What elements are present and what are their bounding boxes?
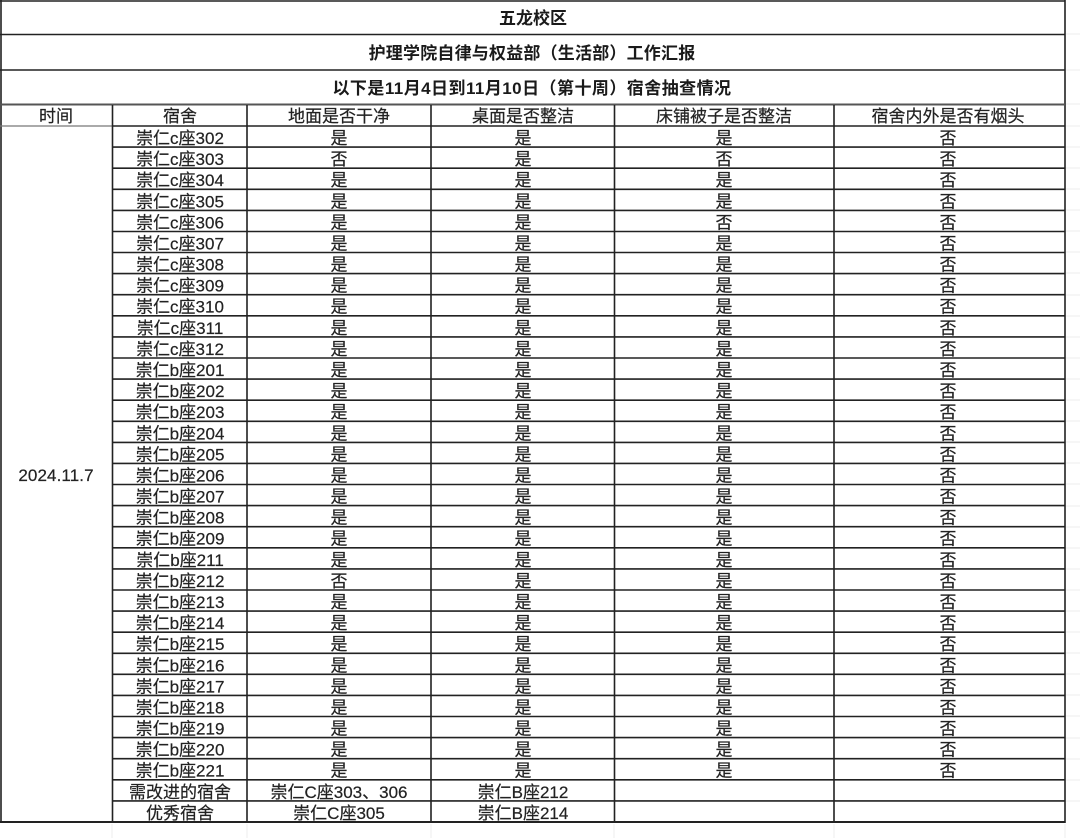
row b214: 是 <box>514 614 532 633</box>
row b201: 是 <box>514 361 532 380</box>
row b211: 是 <box>330 551 348 570</box>
row b219: 是 <box>330 720 348 738</box>
row c312: 是 <box>716 340 732 359</box>
row c304 <box>136 171 956 190</box>
row b215 <box>136 635 956 654</box>
row c309 <box>136 277 956 296</box>
row b213: 崇仁b座213 <box>136 593 224 612</box>
row b201 <box>136 361 956 380</box>
row c306 <box>136 213 956 232</box>
row b219: 崇仁b座219 <box>136 720 224 738</box>
row c308: 崇仁c座308 <box>136 256 224 274</box>
row b203 <box>136 403 956 422</box>
row b204: 否 <box>940 424 956 443</box>
row c302: 是 <box>716 129 732 148</box>
title: campus: 五龙校区 <box>499 8 567 28</box>
row b202: 是 <box>330 382 348 401</box>
row b203: 否 <box>940 403 956 422</box>
row b208: 是 <box>330 509 348 528</box>
row c305: 是 <box>514 192 532 211</box>
row c305: 否 <box>940 192 956 211</box>
row b209: 否 <box>940 530 956 549</box>
row b203: 崇仁b座203 <box>136 403 224 422</box>
row c306: 否 <box>716 213 732 232</box>
row b202: 是 <box>514 382 532 401</box>
row c306: 崇仁c座306 <box>136 213 224 232</box>
row c302: 崇仁c座302 <box>136 129 224 148</box>
row b205: 崇仁b座205 <box>136 445 224 464</box>
row b201: 是 <box>716 361 732 380</box>
row b219: 是 <box>514 720 532 738</box>
table header row: 宿舍 <box>163 107 197 126</box>
row b203: 是 <box>514 403 532 422</box>
row b202 <box>136 382 956 401</box>
row b221: 崇仁b座221 <box>136 762 224 781</box>
row: excellent dorms: 崇仁C座305 <box>293 804 385 823</box>
row b211: 否 <box>940 551 956 570</box>
title: inspection period: 以下是11月4日到11月10日（第十周）宿舍抽查情况 <box>332 78 732 98</box>
row b204: 是 <box>716 424 732 443</box>
row b219: 否 <box>940 720 956 738</box>
row c304: 崇仁c座304 <box>136 171 224 190</box>
row c310: 是 <box>716 298 732 317</box>
row b212: 否 <box>330 572 348 591</box>
row b221: 是 <box>514 762 532 781</box>
row: dorms needing improvement: 崇仁C座303、306 <box>270 783 408 802</box>
row b208: 否 <box>940 509 956 528</box>
row b215: 是 <box>330 635 348 654</box>
row b214: 是 <box>330 614 348 633</box>
row c309: 是 <box>716 277 732 296</box>
row c307: 是 <box>514 234 532 254</box>
row c303: 是 <box>514 150 532 169</box>
row b214: 是 <box>716 614 732 633</box>
row b221 <box>136 762 956 781</box>
row c304: 是 <box>330 171 348 190</box>
row b220: 是 <box>514 741 532 760</box>
row c303 <box>136 150 956 169</box>
row c312 <box>136 340 956 359</box>
row b218: 崇仁b座218 <box>136 698 224 717</box>
row b206: 否 <box>940 466 956 485</box>
row c309: 是 <box>514 277 532 296</box>
row c309: 否 <box>940 277 956 296</box>
row b202: 否 <box>940 382 956 401</box>
row c311: 是 <box>514 319 532 338</box>
table header row: 时间 <box>39 107 73 126</box>
row b211: 崇仁b座211 <box>136 551 224 570</box>
row c312: 否 <box>940 340 956 359</box>
row b211: 是 <box>514 551 532 570</box>
row b219 <box>136 720 956 738</box>
row c311 <box>137 319 956 338</box>
row b212: 否 <box>940 572 956 591</box>
row b206 <box>136 466 956 485</box>
row c305 <box>136 192 956 211</box>
row: dorms needing improvement: 崇仁B座212 <box>478 783 568 802</box>
row b216: 是 <box>330 656 348 675</box>
row c309: 崇仁c座309 <box>136 277 224 296</box>
date cell: 2024.11.7 <box>18 466 94 485</box>
table header row: 桌面是否整洁 <box>472 107 574 126</box>
row b217: 是 <box>716 677 732 696</box>
row c312: 是 <box>514 340 532 359</box>
row c311: 是 <box>716 319 732 338</box>
row c312: 是 <box>330 340 348 359</box>
row c305: 是 <box>716 192 732 211</box>
row b220: 是 <box>330 741 348 760</box>
row c308: 是 <box>514 256 532 274</box>
row b203: 是 <box>716 403 732 422</box>
row b216: 是 <box>716 656 732 675</box>
row b202: 崇仁b座202 <box>136 382 224 401</box>
row c307 <box>136 234 956 254</box>
row b217: 是 <box>514 677 532 696</box>
row b215: 是 <box>514 635 532 654</box>
row c304: 是 <box>514 171 532 190</box>
row b209: 是 <box>330 530 348 549</box>
row c307: 崇仁c座307 <box>136 234 224 254</box>
row b221: 是 <box>716 762 732 781</box>
row b201: 否 <box>940 361 956 380</box>
row b217: 否 <box>940 677 956 696</box>
row b206: 是 <box>716 466 732 485</box>
row b204 <box>136 424 956 443</box>
row c305: 崇仁c座305 <box>136 192 224 211</box>
row b213: 否 <box>940 593 956 612</box>
row b220 <box>136 741 956 760</box>
row b209: 崇仁b座209 <box>136 530 224 549</box>
row c308: 是 <box>716 256 732 274</box>
row b216: 崇仁b座216 <box>136 656 224 675</box>
row b215: 是 <box>716 635 732 654</box>
row b205 <box>136 445 956 464</box>
row b218: 是 <box>330 698 348 717</box>
row b205: 是 <box>514 445 532 464</box>
row b202: 是 <box>716 382 732 401</box>
row c312: 崇仁c座312 <box>136 340 224 359</box>
row b207: 否 <box>940 488 956 506</box>
row b207: 是 <box>514 488 532 506</box>
row b201: 是 <box>330 361 348 380</box>
row b207: 是 <box>716 488 732 506</box>
row b204: 是 <box>330 424 348 443</box>
row b214 <box>136 614 956 633</box>
row c306: 是 <box>514 213 532 232</box>
row b216: 否 <box>940 656 956 675</box>
table header row: 宿舍内外是否有烟头 <box>872 107 1024 126</box>
row b220: 是 <box>716 741 732 760</box>
row b204: 崇仁b座204 <box>136 424 224 443</box>
row b206: 是 <box>330 466 348 485</box>
row b214: 崇仁b座214 <box>136 614 224 633</box>
row c308 <box>136 256 956 274</box>
row b201: 崇仁b座201 <box>136 361 224 380</box>
row: dorms needing improvement: 需改进的宿舍 <box>129 783 231 802</box>
row b205: 是 <box>716 445 732 464</box>
row c303: 否 <box>330 150 348 169</box>
row b215: 否 <box>940 635 956 654</box>
row c302: 否 <box>940 129 956 148</box>
row c303: 否 <box>716 150 732 169</box>
title: department report: 护理学院自律与权益部（生活部）工作汇报 <box>369 43 695 63</box>
row c308: 是 <box>330 256 348 274</box>
row: excellent dorms: 优秀宿舍 <box>146 804 214 823</box>
row b205: 是 <box>330 445 348 464</box>
row b212 <box>136 572 956 591</box>
row b203: 是 <box>330 403 348 422</box>
row c310 <box>136 298 956 317</box>
row c310: 否 <box>940 298 956 317</box>
row b207: 是 <box>330 488 348 506</box>
row b206: 崇仁b座206 <box>136 466 224 485</box>
row c306: 否 <box>940 213 956 232</box>
row b218: 是 <box>716 698 732 717</box>
row b212: 是 <box>716 572 732 591</box>
row b218: 是 <box>514 698 532 717</box>
row c311: 崇仁c座311 <box>137 319 223 338</box>
row b220: 否 <box>940 741 956 760</box>
row b218 <box>136 698 956 717</box>
row b214: 否 <box>940 614 956 633</box>
row c307: 是 <box>716 234 732 254</box>
row c302: 是 <box>514 129 532 148</box>
row b206: 是 <box>514 466 532 485</box>
row b208 <box>136 509 956 528</box>
row c304: 是 <box>716 171 732 190</box>
row b215: 崇仁b座215 <box>136 635 224 654</box>
row b219: 是 <box>716 720 732 738</box>
row c310: 是 <box>514 298 532 317</box>
row b207 <box>136 488 956 506</box>
row b213: 是 <box>514 593 532 612</box>
row b208: 崇仁b座208 <box>136 509 224 528</box>
row b216 <box>136 656 956 675</box>
row c310: 崇仁c座310 <box>136 298 224 317</box>
row b209: 是 <box>514 530 532 549</box>
row b211: 是 <box>716 551 732 570</box>
row c306: 是 <box>330 213 348 232</box>
row b217: 崇仁b座217 <box>136 677 224 696</box>
row c307: 否 <box>940 234 956 254</box>
row b218: 否 <box>940 698 956 717</box>
row c305: 是 <box>330 192 348 211</box>
row b209 <box>136 530 956 549</box>
row b213 <box>136 593 956 612</box>
row c311: 是 <box>330 319 348 338</box>
row b212: 崇仁b座212 <box>136 572 224 591</box>
row b205: 否 <box>940 445 956 464</box>
row b221: 否 <box>940 762 956 781</box>
row b213: 是 <box>330 593 348 612</box>
row b208: 是 <box>716 509 732 528</box>
row b207: 崇仁b座207 <box>136 488 224 506</box>
row: dorms needing improvement <box>129 783 568 802</box>
row b204: 是 <box>514 424 532 443</box>
row b217: 是 <box>330 677 348 696</box>
row c302: 是 <box>330 129 348 148</box>
row c309: 是 <box>330 277 348 296</box>
row b220: 崇仁b座220 <box>136 741 224 760</box>
row b212: 是 <box>514 572 532 591</box>
row: excellent dorms <box>146 804 568 823</box>
table header row: 地面是否干净 <box>288 107 390 126</box>
row c303: 否 <box>940 150 956 169</box>
row: excellent dorms: 崇仁B座214 <box>478 804 568 823</box>
row b216: 是 <box>514 656 532 675</box>
row c308: 否 <box>940 256 956 274</box>
row b208: 是 <box>514 509 532 528</box>
table header row: 床铺被子是否整洁 <box>656 107 792 126</box>
row c307: 是 <box>330 234 348 254</box>
row b209: 是 <box>716 530 732 549</box>
row c304: 否 <box>940 171 956 190</box>
row b221: 是 <box>330 762 348 781</box>
row b211 <box>136 551 956 570</box>
row b213: 是 <box>716 593 732 612</box>
row c310: 是 <box>330 298 348 317</box>
row c311: 否 <box>940 319 956 338</box>
row c302 <box>136 129 956 148</box>
row c303: 崇仁c座303 <box>136 150 224 169</box>
row b217 <box>136 677 956 696</box>
table header row <box>39 107 1024 126</box>
